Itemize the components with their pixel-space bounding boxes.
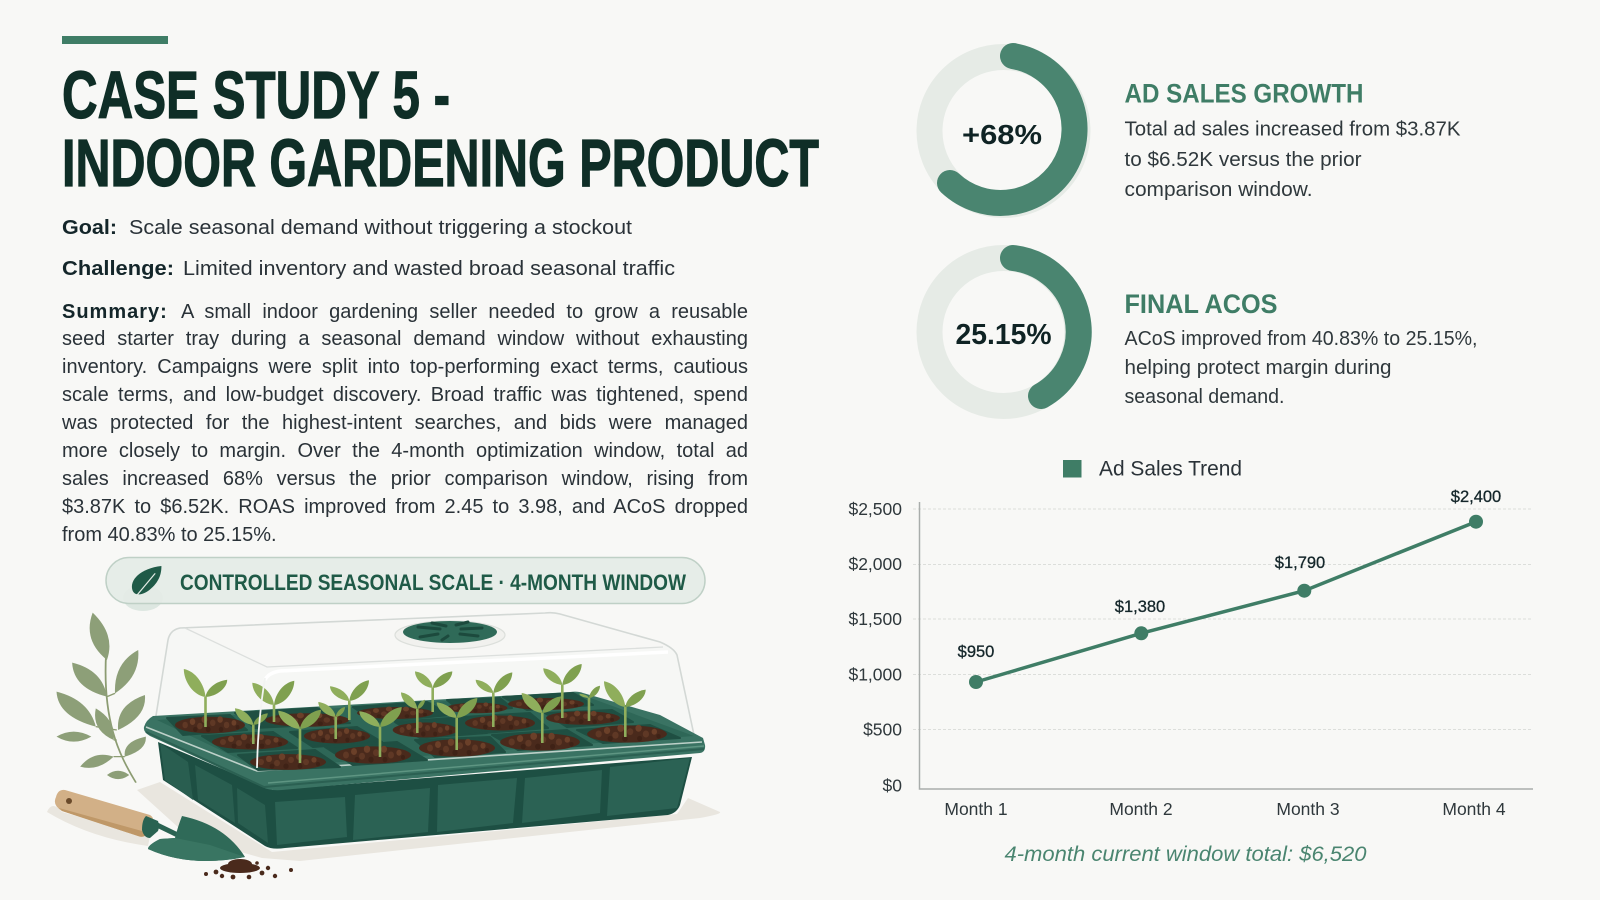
accent bar [62, 36, 168, 44]
description: final acos: seasonal demand. [1124, 386, 1284, 408]
data labels: $950 [958, 643, 994, 661]
panel: ad sales growth [930, 56, 1461, 205]
soil [175, 697, 667, 770]
challenge line: Challenge: [62, 258, 174, 280]
summary paragraph: $3.87K to $6.52K. ROAS improved from 2.45 to 3.98, and ACoS dropped [62, 496, 748, 518]
x axis labels: Month 3 [1276, 799, 1340, 819]
illustration: seed tray with dome, plant and trowel [47, 613, 720, 879]
data labels: $2,400 [1451, 488, 1501, 506]
description: ad sales growth [1124, 118, 1461, 201]
y axis labels: $1,000 [848, 664, 902, 684]
y axis labels: $1,500 [848, 609, 902, 629]
x axis labels: Month 2 [1109, 799, 1173, 819]
y axis labels: $500 [863, 720, 902, 740]
title [62, 58, 819, 201]
summary paragraph: scale terms, and low-budget discovery. Broad traffic was tightened, spend [62, 384, 748, 406]
panel: final acos [930, 258, 1478, 408]
clear dome lid [155, 613, 695, 738]
description: final acos: helping protect margin during [1124, 357, 1392, 379]
summary paragraph: inventory. Campaigns were split into top-performing exact terms, cautious [62, 356, 748, 378]
description: ad sales growth: comparison window. [1124, 179, 1312, 201]
ground shadow [47, 782, 720, 861]
goal line: Goal: [62, 217, 117, 239]
summary paragraph: from 40.83% to 25.15%. [62, 524, 277, 546]
x axis labels [944, 799, 1506, 819]
y axis labels [848, 499, 902, 796]
donut: +68%: +68% [962, 119, 1042, 150]
y axis labels: $2,500 [848, 499, 902, 519]
donut: +68% [930, 56, 1078, 205]
spilled soil [204, 859, 293, 879]
description: ad sales growth: Total ad sales increased from $3.87K [1124, 118, 1461, 140]
trowel [55, 790, 245, 861]
legend: Ad Sales Trend [1099, 458, 1242, 480]
dome vent [395, 621, 505, 649]
challenge line: Limited inventory and wasted broad seasonal traffic [183, 258, 675, 280]
icon: leaf [132, 566, 161, 599]
data labels: $1,790 [1275, 554, 1325, 572]
dome front edge highlight [257, 678, 265, 768]
summary paragraph: more closely to margin. Over the 4-month optimization window, total ad [62, 440, 748, 462]
heading: final acos: FINAL ACOS [1124, 289, 1278, 319]
summary paragraph [62, 300, 748, 546]
data labels [958, 488, 1501, 661]
goal line: Scale seasonal demand without triggering a stockout [129, 217, 632, 239]
summary paragraph: was protected for the highest-intent searches, and bids were managed [62, 412, 748, 434]
donut: 25.15%: 25.15% [956, 319, 1052, 351]
title: INDOOR GARDENING PRODUCT [62, 126, 819, 201]
description: final acos [1124, 328, 1478, 408]
pill label: CONTROLLED SEASONAL SCALE · 4-MONTH WINDOW [180, 570, 686, 595]
summary paragraph: seed starter tray during a seasonal demand window without exhausting [62, 328, 748, 350]
seedlings [184, 664, 646, 763]
description: final acos: ACoS improved from 40.83% to 25.15%, [1124, 328, 1478, 350]
tray rim [144, 692, 705, 790]
description: ad sales growth: to $6.52K versus the prior [1124, 149, 1362, 171]
data labels: $1,380 [1115, 598, 1165, 616]
heading: ad sales growth: AD SALES GROWTH [1124, 78, 1364, 108]
line chart: ad sales trend [848, 458, 1533, 819]
sprig plant [57, 613, 146, 783]
trend line with markers [969, 515, 1483, 689]
chart caption: 4-month current window total: $6,520 [1004, 843, 1367, 866]
x axis labels: Month 4 [1442, 799, 1506, 819]
donut: 25.15% [930, 258, 1079, 406]
tray cells [167, 693, 680, 770]
y axis labels: $0 [883, 776, 902, 796]
x axis labels: Month 1 [944, 799, 1008, 819]
summary paragraph: sales increased 68% versus the prior comparison window, rising from [62, 468, 748, 490]
summary paragraph: Summary: A small indoor gardening seller needed to grow a reusable [62, 300, 748, 322]
y axis labels: $2,000 [848, 554, 902, 574]
tag pill [106, 558, 705, 611]
tray body [158, 742, 692, 849]
title: CASE STUDY 5 - [62, 58, 450, 133]
